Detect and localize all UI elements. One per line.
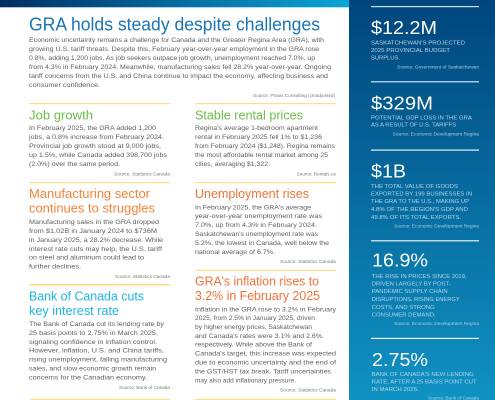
heading: inflation [195, 273, 320, 303]
stat description: exports: THE TOTAL VALUE OF GOODS [371, 184, 458, 190]
inflation text: Canada's target, this increase was expected [195, 351, 336, 358]
stat description: budget surplus: SASKATCHEWAN'S PROJECTED [371, 40, 465, 46]
bank of canada text: concerns for the Canadian economy. [29, 375, 147, 382]
stat number: 1B: $1B [371, 160, 406, 181]
stat description: lending rate: RATE, AFTER A 25 BASIS POINT CUT [372, 380, 477, 386]
stat description: price rise: CONSUMER DEMAND. [372, 312, 436, 318]
job growth text: (2.0%) over the same period. [29, 161, 120, 168]
unemployment text: national average of 6.7%. [195, 249, 275, 256]
inflation text: due to economic uncertainty and the end of [195, 360, 336, 367]
manufacturing text: on steel and aluminum could lead to [29, 254, 144, 261]
stat description: price rise: THE RISE IN PRICES SINCE 2019, [372, 274, 467, 280]
job growth source: Source: Statistics Canada [114, 172, 171, 177]
intro text block [29, 37, 331, 89]
bank of canada text: sales, and slow economic growth remain [29, 366, 156, 373]
inflation text [195, 306, 337, 385]
bank of canada text: signaling confidence in inflation control. [29, 339, 157, 346]
heading: bank of canada: Bank of Canada cuts [29, 289, 144, 304]
inflation text: and Canada's rates were 3.1% and 2.6%, [195, 333, 324, 340]
stat description: price rise: DISRUPTIONS, RISING ENERGY [372, 297, 460, 303]
heading: manufacturing: Manufacturing sector [29, 186, 151, 201]
stat: lending rate [371, 338, 480, 400]
rental text: Regina's average 1-bedroom apartment [195, 125, 318, 132]
stat description: GDP loss: POTENTIAL GDP LOSS IN THE GRA [371, 115, 472, 121]
rental text: from February 2024 ($1,248). Regina remains [195, 143, 336, 150]
intro text block: Economic uncertainty remains a challenge for Canada and the Greater Regina Area (GRA), with [29, 37, 324, 44]
stat: exports [371, 150, 480, 229]
heading: manufacturing: continues to struggles [29, 200, 155, 215]
job growth text: In February 2025, the GRA added 1,200 [29, 125, 156, 132]
rental text: cities, averaging $1,322. [195, 161, 270, 168]
bank of canada text: However, inflation, U.S. and China tariffs, [29, 348, 164, 355]
unemployment text [195, 204, 329, 256]
inflation text: the GST/HST tax break. Tariff uncertainties [195, 369, 332, 376]
panel: sidebar background [349, 0, 495, 400]
job growth text: jobs, a 0.8% increase from February 2024. [28, 134, 164, 141]
stat description: budget surplus: SURPLUS. [371, 56, 400, 62]
heading: bank of canada: key interest rate [29, 303, 119, 318]
heading: inflation: GRA's inflation rises to [195, 273, 319, 288]
stat source: price rise: Source: Economic Development Regina [394, 321, 480, 326]
stat description: exports: EXPORTED BY 199 BUSINESSES IN [371, 192, 472, 198]
intro text block: tariff concerns from the U.S. and China continue to impact the economy, affecting business and [29, 73, 328, 80]
manufacturing text: Manufacturing sales in the GRA dropped [29, 219, 159, 226]
panel: job growth [28, 103, 171, 177]
stat description: GDP loss: AS A RESULT OF U.S. TARIFFS [371, 123, 456, 129]
stat description: exports: 4.8% OF THE REGION'S GDP AND [371, 207, 468, 213]
heading: inflation: 3.2% in February 2025 [195, 288, 320, 303]
manufacturing text: from $1.02B in January 2024 to $736M [29, 228, 157, 235]
heading: manufacturing [29, 186, 155, 215]
heading: job growth: Job growth [29, 108, 93, 122]
stat description: exports [371, 184, 472, 221]
unemployment source: Source: Statistics Canada [280, 259, 337, 264]
inflation text: may also add inflationary pressure. [195, 378, 296, 385]
stat: price rise [371, 240, 480, 326]
intro source: Source: Praxis Consulting (Unadjusted) [253, 93, 336, 98]
stat description: price rise: DRIVEN LARGELY BY POST- [372, 282, 451, 288]
stat description: exports: THE GRA TO THE U.S., MAKING UP [371, 199, 469, 205]
stat description: budget surplus [371, 40, 465, 62]
stat number: 12.2M: $12.2M [371, 17, 437, 38]
stat description: GDP loss [371, 115, 472, 129]
panel: unemployment [195, 182, 337, 264]
manufacturing text: further declines. [29, 263, 81, 270]
stat: GDP loss [371, 81, 480, 137]
stat description: lending rate: BANK OF CANADA'S NEW LENDING [372, 372, 474, 378]
bank of canada text: 25 basis points to 2.75% in March 2025, [29, 330, 158, 337]
stat number: 329M: $329M [371, 92, 433, 113]
stat description: lending rate: IN MARCH 2025. [372, 387, 419, 393]
panel: stable rental prices [195, 103, 336, 177]
stat source: budget surplus: Source: Government of Saskatchewan [397, 65, 480, 70]
intro text block: 0.8%, adding 1,200 jobs. As job seekers outpace job growth, unemployment reached 7.0%, up [29, 55, 315, 62]
rental text: the most affordable rental market among 25 [195, 152, 328, 159]
heading: stable rental prices: Stable rental prices [195, 108, 303, 122]
panel: manufacturing [29, 182, 171, 279]
stat: budget surplus [371, 6, 480, 70]
unemployment text: year-over-year unemployment rate was [195, 213, 323, 220]
inflation text: 2025, from 2.5% in January 2025, driven [195, 315, 315, 322]
stat source: GDP loss: Source: Economic Development Regina [393, 132, 480, 137]
job growth text: up 1.5%, while Canada added 398,700 jobs [29, 152, 168, 159]
stat description: exports: 49.8% OF ITS TOTAL EXPORTS. [371, 215, 461, 221]
inflation source: Source: Statistics Canada [280, 388, 337, 393]
bank of canada text: The Bank of Canada cut its lending rate by [29, 321, 165, 328]
unemployment text: In February 2025, the GRA's average [195, 204, 311, 211]
bank of canada source: Source: Bank of Canada [119, 385, 171, 390]
title: GRA holds steady despite challenges [29, 15, 320, 35]
bank of canada text: rising unemployment, falling manufacturing [29, 357, 167, 364]
rental source: Source: Rentals.ca [297, 172, 336, 177]
stat description: budget surplus: 2025 PROVINCIAL BUDGET [371, 48, 450, 54]
job growth text [28, 125, 168, 168]
inflation text: by higher energy prices. Saskatchewan [195, 324, 312, 331]
manufacturing text: interest rate cuts may help, the U.S. tariff [29, 246, 162, 253]
unemployment text: 7.0%, up from 4.3% in February 2024. [195, 222, 317, 229]
stat description: price rise [372, 274, 467, 318]
unemployment text: Saskatchewan's unemployment rate was [195, 231, 319, 238]
top gradient band [0, 0, 349, 7]
stat description: price rise: COSTS, AND STRONG [372, 305, 435, 311]
manufacturing source: Source: Statistics Canada [115, 274, 171, 279]
rental text: rental in February 2025 fell 1% to $1,236 [195, 134, 322, 141]
heading: bank of canada [29, 289, 144, 318]
stat description: price rise: PANDEMIC SUPPLY CHAIN [372, 289, 448, 295]
intro text block: growing U.S. tariff threats. Despite this, February year-over-year employment in the GRA rose [29, 46, 319, 53]
stat number: 2.75 percent: 2.75% [372, 349, 428, 370]
stat source: exports: Source: Economic Development Regina [394, 224, 480, 229]
panel: bank of canada [29, 284, 171, 400]
rental text [195, 125, 336, 168]
unemployment text: 5.2%, the lowest in Canada, well below the [195, 240, 329, 247]
stat description: lending rate [372, 372, 477, 393]
heading: unemployment: Unemployment rises [195, 186, 309, 201]
manufacturing text: in January 2025, a 28.2% decrease. While [29, 237, 163, 244]
inflation text: respectively. While above the Bank of [195, 342, 312, 349]
job growth text: Provincial job growth stood at 9,000 jobs, [29, 143, 161, 150]
intro text block: consumer confidence. [29, 82, 100, 89]
inflation text: Inflation in the GRA rose to 3.2% in February [195, 306, 337, 313]
manufacturing text [29, 219, 163, 270]
panel: inflation [195, 270, 337, 400]
stat number: 16.9 percent: 16.9% [372, 250, 428, 271]
intro text block: from 4.3% in February 2024. Meanwhile, manufacturing sales fell 28.2% year-over-year. Ongoing [29, 64, 331, 71]
bank of canada text [29, 321, 167, 382]
